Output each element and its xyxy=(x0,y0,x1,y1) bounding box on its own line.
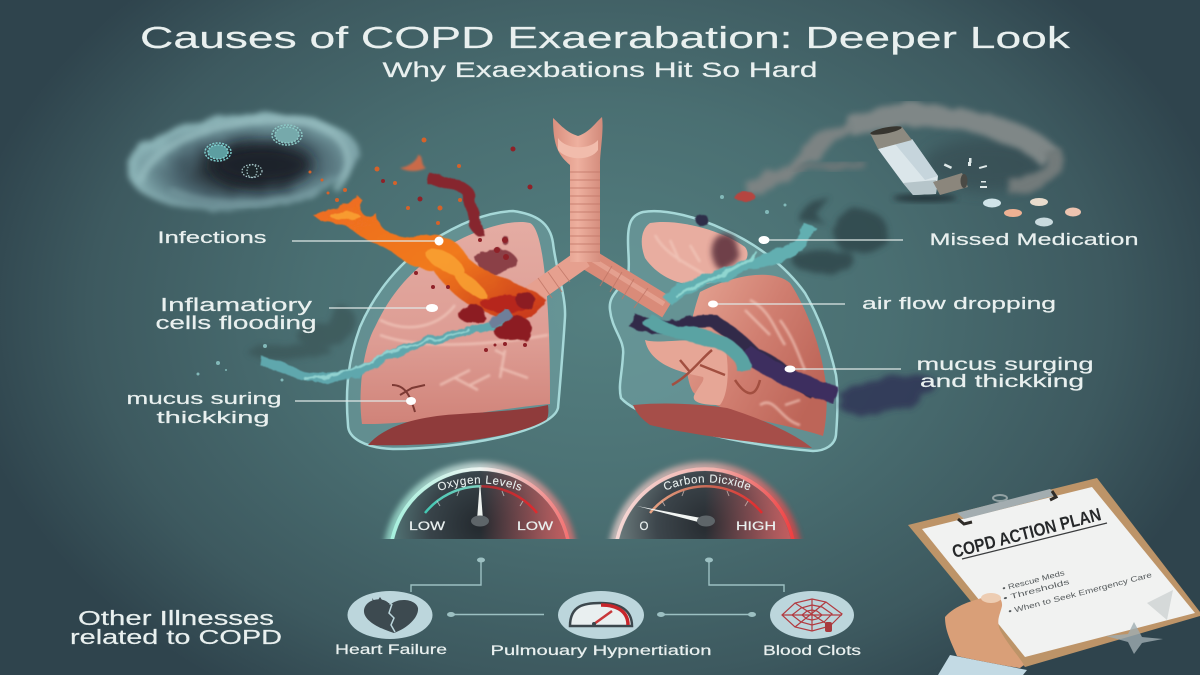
connectors xyxy=(411,558,784,617)
heading: other illnesses: Other Illnesses xyxy=(78,608,274,630)
left lung xyxy=(347,211,565,449)
callout: inflammatory cells: Inflamatiory xyxy=(160,295,312,315)
plan bullets: • Rescue Meds xyxy=(1001,568,1066,593)
icon: infection swirl with viruses xyxy=(123,104,363,220)
right upper lobe xyxy=(642,222,748,285)
dark shadow inside ring xyxy=(923,139,1047,191)
callout: infections xyxy=(158,229,444,247)
label: heart failure: Heart Failure xyxy=(335,642,447,657)
gauge: carbon dioxide: O xyxy=(640,521,649,533)
right diaphragm xyxy=(633,404,812,448)
teal mucus stream left xyxy=(262,312,510,380)
gauge: carbon dioxide xyxy=(606,458,804,539)
metal clip xyxy=(957,489,1057,524)
icon: heart failure xyxy=(348,591,432,639)
callout: missed medication: Missed Medication xyxy=(930,230,1138,249)
flame core xyxy=(330,212,490,303)
callout: mucus surging: mucus surging xyxy=(916,354,1094,374)
right airway branches xyxy=(655,235,805,425)
left airway branches xyxy=(380,305,548,390)
bronchi xyxy=(530,258,668,308)
gauge: oxygen levels: LOW xyxy=(409,521,445,533)
trachea xyxy=(530,117,668,308)
flame wisp xyxy=(400,155,426,171)
callout: inflammatory cells xyxy=(156,295,438,333)
inhaler shadow xyxy=(893,194,957,202)
dark patch with clots xyxy=(474,236,517,275)
heading: other illnesses xyxy=(70,608,282,649)
callout: mucus suring xyxy=(126,389,416,427)
gauge: oxygen levels xyxy=(382,458,579,539)
clipboard: COPD action plan xyxy=(908,478,1200,675)
diagram: lungs and trachea xyxy=(196,117,938,451)
plan title: COPD ACTION PLAN xyxy=(950,504,1103,562)
subtitle: Why Exaexbations Hit So Hard xyxy=(382,59,818,82)
callout: mucus suring: thickking xyxy=(156,408,270,427)
callout: air flow dropping: air flow dropping xyxy=(862,294,1056,313)
teal mucus stream right lower xyxy=(648,320,745,372)
plan bullets: • When to Seek Emergency Care xyxy=(1007,570,1153,616)
inhaler body xyxy=(870,125,968,195)
sleeve xyxy=(938,655,1027,675)
right lung vessels xyxy=(672,350,760,393)
left lung glass shell xyxy=(347,211,565,449)
spray flecks xyxy=(944,158,987,188)
label: blood clots: Blood Clots xyxy=(763,643,861,658)
right lung xyxy=(610,211,838,451)
orange flame stream xyxy=(313,194,546,320)
red embers xyxy=(734,193,756,201)
right lung glass shell xyxy=(610,211,838,451)
title: Causes of COPD Exaerabation: Deeper Look xyxy=(140,20,1071,55)
left diaphragm xyxy=(368,405,548,445)
smoke plume xyxy=(745,125,855,188)
callout: inflammatory cells: cells flooding xyxy=(156,313,316,333)
label: pulmonary hypertension: Pulmouary Hypnertiation xyxy=(490,643,712,658)
mist specks around left mucus xyxy=(196,195,786,382)
heading: other illnesses: related to COPD xyxy=(70,627,282,649)
callout: mucus surging xyxy=(784,354,1094,391)
grey star highlight xyxy=(1106,622,1163,654)
dark cloud right upper xyxy=(793,198,888,274)
gauge: carbon dioxide: HIGH xyxy=(736,521,776,533)
plan bullets xyxy=(1001,568,1153,616)
icon: virus two xyxy=(272,125,302,145)
clipboard board xyxy=(908,478,1200,667)
icon: pulmonary pressure gauge xyxy=(558,591,644,639)
callout: infections: Infections xyxy=(158,229,266,247)
callout: mucus suring: mucus suring xyxy=(126,389,282,408)
callout: missed medication xyxy=(758,230,1138,249)
title underline xyxy=(962,523,1107,559)
dark bruise on upper lobe xyxy=(710,234,740,270)
icon: blood clot web xyxy=(770,591,854,639)
icon: virus three xyxy=(242,164,262,178)
page corner fold xyxy=(1147,590,1173,620)
paper xyxy=(922,487,1195,657)
left lung tissue xyxy=(361,222,550,424)
dark purple mucus right lower xyxy=(632,320,938,417)
icon: virus one xyxy=(205,143,231,161)
dark red plume xyxy=(428,178,484,231)
callout: air flow dropping xyxy=(708,294,1056,313)
teal mucus stream right upper xyxy=(668,225,810,302)
gauge: carbon dioxide: Carbon Dicxide xyxy=(664,474,750,490)
hand xyxy=(945,595,1024,668)
gauge: oxygen levels: Oxygen Levels xyxy=(438,476,522,490)
dark smoke left of left lung xyxy=(248,307,357,360)
gauge: oxygen levels: LOW xyxy=(517,521,553,533)
clotted blood xyxy=(458,292,535,341)
flame of inflammation xyxy=(308,138,546,352)
icon: smoke plume and inhaler with pills xyxy=(734,114,1081,226)
orange-red embers xyxy=(381,146,532,352)
pills xyxy=(983,198,1081,226)
callout: mucus surging: and thickking xyxy=(920,371,1084,391)
left lung vessel xyxy=(392,385,425,412)
plan bullets: • Thresholds xyxy=(1002,577,1071,603)
right lower lobe xyxy=(687,275,827,436)
